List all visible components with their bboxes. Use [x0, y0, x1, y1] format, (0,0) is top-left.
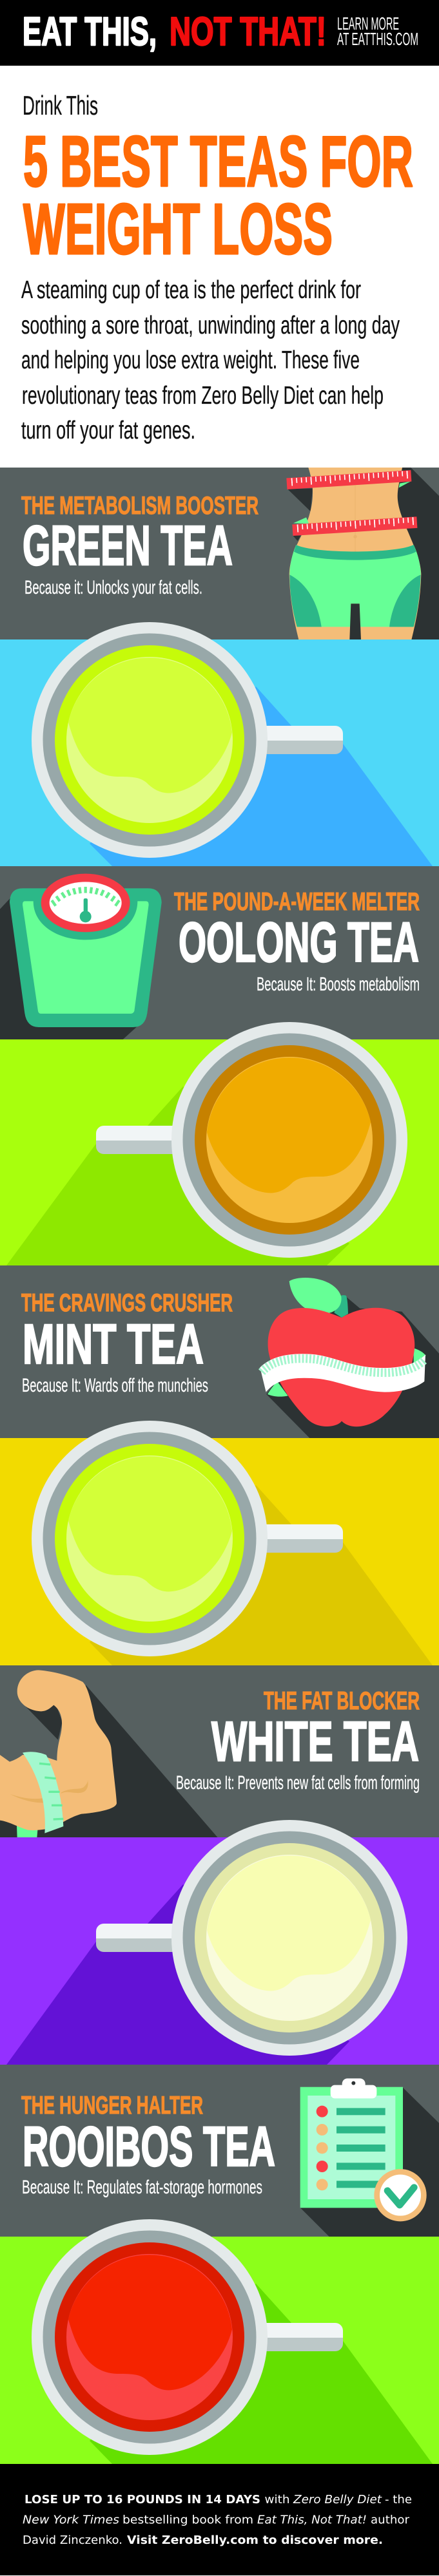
- footer call to action: - the: [385, 2494, 412, 2506]
- panel: rooibos tea heading: [0, 2065, 439, 2237]
- logo: not that: NOT THAT!: [170, 9, 326, 54]
- icon: oolong tea cup: [6, 1022, 407, 1265]
- logo: eat this: EAT THIS,: [23, 9, 157, 54]
- reason: rooibos tea: Because It: Regulates fat-storage hormones: [22, 2177, 262, 2198]
- panel: white tea heading: [0, 1665, 439, 1838]
- panel: green tea heading: [0, 468, 439, 639]
- icon: green tea cup: [32, 622, 433, 866]
- icon: flexed arm with tape: [0, 1670, 218, 1838]
- panel: rooibos tea cup on green: [0, 2237, 439, 2464]
- tea name: mint tea: MINT TEA: [23, 1313, 204, 1376]
- icon: apple with tape: [260, 1278, 439, 1438]
- footer call to action: Eat This, Not That!: [257, 2514, 367, 2527]
- footer call to action: bestselling book from: [122, 2514, 253, 2527]
- tea name: rooibos tea: ROOIBOS TEA: [23, 2116, 275, 2178]
- tea name: green tea: GREEN TEA: [23, 515, 233, 577]
- footer call to action: LOSE UP TO 16 POUNDS IN 14 DAYS: [24, 2494, 260, 2506]
- footer call to action: [0, 2464, 439, 2575]
- label: cravings crusher: THE CRAVINGS CRUSHER: [21, 1289, 233, 1317]
- label: hunger halter: THE HUNGER HALTER: [21, 2092, 203, 2119]
- kicker: drink this: Drink This: [23, 90, 98, 120]
- panel: mint tea heading: [0, 1265, 439, 1438]
- intro paragraph: [21, 276, 400, 444]
- label: metabolism booster: THE METABOLISM BOOSTER: [21, 492, 259, 520]
- reason: mint tea: Because It: Wards off the munchies: [22, 1375, 208, 1396]
- footer call to action: Visit ZeroBelly.com to discover more.: [127, 2534, 383, 2547]
- icon: weighing scale: [0, 874, 162, 1039]
- footer call to action: with: [264, 2494, 290, 2506]
- footer call to action: Zero Belly Diet: [293, 2494, 382, 2506]
- title: [23, 122, 413, 269]
- footer call to action: David Zinczenko.: [23, 2534, 122, 2547]
- icon: mint tea cup: [32, 1421, 433, 1665]
- icon: rooibos tea cup: [32, 2219, 433, 2464]
- intro paragraph: turn off your fat genes.: [21, 417, 195, 444]
- footer call to action: author: [371, 2514, 410, 2527]
- panel: oolong tea cup on lime: [0, 1039, 439, 1265]
- header bar: [0, 0, 439, 66]
- footer call to action: New York Times: [23, 2514, 119, 2527]
- reason: green tea: Because it: Unlocks your fat cells.: [24, 577, 202, 598]
- icon: clipboard checklist: [300, 2078, 439, 2237]
- icon: waist with measuring tape: [286, 468, 439, 639]
- panel: oolong tea heading: [0, 866, 439, 1039]
- panel: mint tea cup on yellow: [0, 1438, 439, 1665]
- icon: white tea cup: [6, 1820, 407, 2065]
- panel: white tea cup on purple: [0, 1837, 439, 2065]
- panel: green tea cup on blue: [0, 639, 439, 866]
